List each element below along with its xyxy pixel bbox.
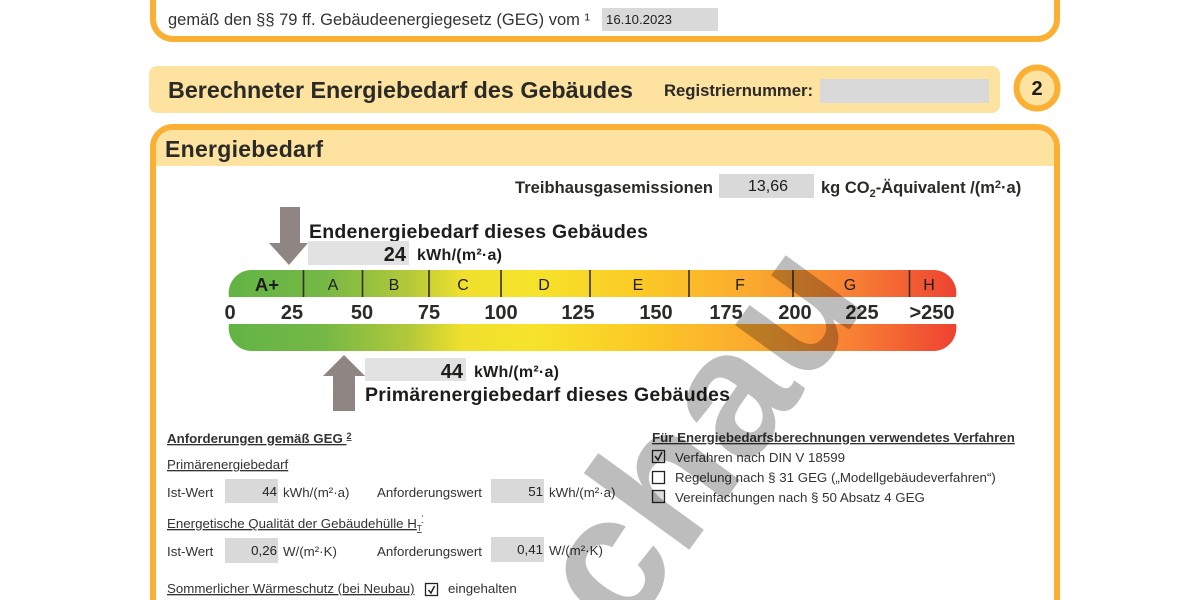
scale numbers — [224, 302, 955, 324]
primary energy values: kWh/(m²·a) — [283, 485, 349, 500]
method heading: Für Energiebedarfsberechnungen verwendetes Verfahren — [652, 430, 1015, 445]
building envelope values: W/(m²·K) — [283, 544, 337, 559]
greenhouse gas emissions: kg CO — [821, 179, 870, 197]
registration number: Registriernummer: — [664, 81, 813, 100]
arrow: final energy — [269, 207, 308, 265]
building envelope values: Ist-Wert — [167, 544, 214, 559]
section heading bar — [149, 66, 1000, 113]
scale numbers: 175 — [709, 302, 743, 324]
building envelope heading: T — [417, 524, 422, 533]
panel: Energiebedarf — [153, 127, 1057, 600]
scale bar: classes: C — [457, 277, 469, 294]
primary energy values: Anforderungswert — [377, 485, 482, 500]
panel header — [156, 130, 1054, 166]
building envelope values: Anforderungswert — [377, 544, 482, 559]
greenhouse gas emissions: 13,66 — [748, 178, 788, 195]
scale bar: classes: A+ — [255, 274, 279, 295]
primary energy value: kWh/(m²·a) — [474, 364, 559, 381]
scale numbers: 125 — [561, 302, 595, 324]
page number badge — [1016, 68, 1058, 108]
summer heat protection: Sommerlicher Wärmeschutz (bei Neubau) — [167, 581, 415, 596]
scale numbers: 25 — [281, 302, 303, 324]
scale bar: classes — [229, 270, 956, 297]
top panel: issue date — [153, 0, 1057, 39]
date field — [602, 8, 718, 31]
scale bar: gradient — [229, 324, 956, 351]
method option 3: Vereinfachungen nach § 50 Absatz 4 GEG — [675, 490, 925, 505]
heading: Berechneter Energiebedarf des Gebäudes — [168, 77, 633, 103]
summer heat protection: eingehalten — [448, 581, 517, 596]
scale bar: classes: D — [538, 277, 550, 294]
primary energy heading: Primärenergiebedarf — [167, 457, 289, 472]
method option 1: Verfahren nach DIN V 18599 — [675, 450, 845, 465]
scale bar: classes: H — [923, 277, 935, 294]
final energy value: kWh/(m²·a) — [417, 247, 502, 264]
scale bar: classes: B — [389, 277, 399, 294]
greenhouse gas emissions: Treibhausgasemissionen — [515, 179, 713, 197]
requirements heading: 2 — [347, 431, 352, 441]
requirements heading: Anforderungen gemäß GEG — [167, 431, 343, 446]
greenhouse gas emissions: ·a) — [1001, 179, 1021, 197]
final energy label: Endenergiebedarf dieses Gebäudes — [309, 221, 648, 243]
method option 2: Regelung nach § 31 GEG („Modellgebäudeverfahren“) — [675, 470, 996, 485]
building envelope values — [167, 537, 603, 563]
building envelope values: W/(m²·K) — [549, 543, 603, 558]
date field: 16.10.2023 — [606, 12, 672, 27]
primary energy value: 44 — [441, 361, 464, 383]
primary energy label: Primärenergiebedarf dieses Gebäudes — [365, 384, 730, 406]
scale numbers: 200 — [778, 302, 812, 324]
scale bar: classes: G — [844, 277, 856, 294]
building envelope values: 0,26 — [251, 543, 277, 558]
primary energy value — [365, 358, 559, 383]
scale numbers: 75 — [418, 302, 440, 324]
arrow: primary energy — [323, 355, 365, 411]
panel header: Energiebedarf — [165, 136, 323, 162]
scale numbers: 100 — [484, 302, 518, 324]
greenhouse gas emissions: 2 — [995, 179, 1001, 191]
building envelope values: 0,41 — [517, 542, 543, 557]
scale numbers: 225 — [845, 302, 879, 324]
legal basis text: gemäß den §§ 79 ff. Gebäudeenergiegesetz (GEG) vom ¹ — [168, 11, 590, 29]
greenhouse gas emissions: -Äquivalent /(m — [876, 179, 995, 197]
primary energy values: kWh/(m²·a) — [549, 485, 615, 500]
greenhouse gas emissions — [515, 174, 1021, 200]
primary energy values — [167, 479, 615, 503]
final energy value: 24 — [384, 244, 407, 266]
registration number — [664, 79, 989, 103]
greenhouse gas emissions: 2 — [870, 188, 876, 200]
primary energy values: 51 — [528, 484, 543, 499]
scale bar: classes: F — [735, 277, 745, 294]
primary energy values: Ist-Wert — [167, 485, 214, 500]
scale numbers: >250 — [909, 302, 955, 324]
requirements block — [167, 431, 615, 596]
primary energy values: 44 — [262, 484, 277, 499]
building envelope heading: ' — [422, 514, 424, 523]
final energy value — [308, 241, 502, 266]
building envelope heading: Energetische Qualität der Gebäudehülle H — [167, 516, 417, 531]
page number badge: 2 — [1031, 78, 1043, 100]
scale numbers: 150 — [639, 302, 673, 324]
scale numbers: 0 — [224, 302, 236, 324]
scale bar: classes: A — [328, 277, 339, 294]
scale bar: classes: E — [633, 277, 643, 294]
calculation method block — [652, 430, 1015, 505]
scale numbers: 50 — [351, 302, 373, 324]
